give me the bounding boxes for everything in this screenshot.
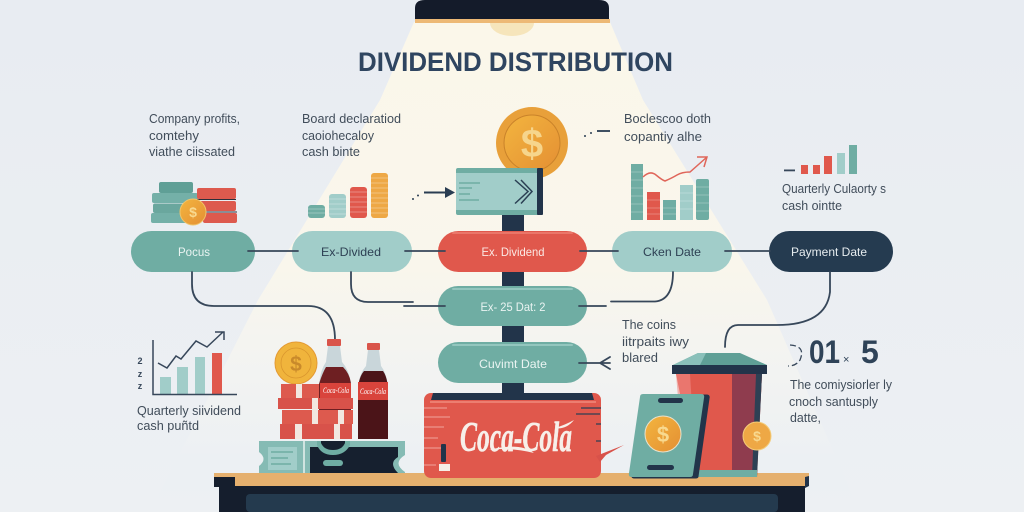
icon: cola bottle back xyxy=(319,339,351,412)
text block: company profits xyxy=(149,112,240,159)
pill: Ex-25 Date 2: Ex- 25 Dat: 2 xyxy=(480,300,546,314)
cooler with logo xyxy=(424,393,601,478)
arrow to sign xyxy=(412,187,455,200)
logo: Coca-Cola: Coca-Cola xyxy=(460,415,572,461)
text block: board declared: caoiohecaloy xyxy=(302,129,375,143)
text block: the coins: blared xyxy=(622,351,658,365)
icon: bottom left chart: 2 xyxy=(137,356,143,366)
table xyxy=(214,473,809,512)
icon: tablet with coin: $ xyxy=(657,422,669,447)
text block: quarterly dividend: Quarterly siividend xyxy=(137,404,241,418)
icon: money stack: $ xyxy=(189,204,197,220)
connectors xyxy=(192,251,830,369)
text block: top right: Boclescoo doth xyxy=(624,112,711,126)
text block: top right: copantiy alhe xyxy=(624,130,702,144)
post xyxy=(502,215,524,395)
icon: coin on bundles: $ xyxy=(290,353,302,376)
text block: quarterly dividend: cash puñtd xyxy=(137,419,199,433)
text block: the company: cnoch santusply xyxy=(789,395,879,409)
icon: ticket device xyxy=(259,441,405,478)
callout number xyxy=(788,334,879,370)
pill: Current Date xyxy=(438,342,587,383)
text block: top right xyxy=(624,112,711,144)
callout number: 5 xyxy=(861,334,879,370)
icon: tablet with coin xyxy=(629,394,710,478)
pill: Pocus xyxy=(131,231,255,272)
icon: coin stacks xyxy=(308,173,388,218)
pill: Ex Dividend xyxy=(438,231,587,272)
text block: the coins: iitrpaits iwy xyxy=(622,335,690,349)
text block: company profits: viathe ciissated xyxy=(149,145,235,159)
text block: board declared xyxy=(302,112,401,159)
title: DIVIDEND DISTRIBUTION xyxy=(358,47,673,77)
icon: money stack xyxy=(151,182,237,225)
icon: bottom left chart: z xyxy=(138,369,143,379)
pill: Payment Date xyxy=(769,231,893,272)
text block: the company xyxy=(789,378,893,425)
icon: cola bucket xyxy=(672,353,767,477)
icon: bottom left chart xyxy=(137,332,237,394)
dots near top right text xyxy=(584,132,592,137)
text block: quarterly dividend xyxy=(137,404,241,433)
icon: top dollar coin: $ xyxy=(521,122,543,166)
light beam xyxy=(150,22,860,512)
icon: bar chart with trend xyxy=(631,157,709,220)
lamp xyxy=(415,0,610,36)
pill: Ex-25 Date 2 xyxy=(438,286,587,326)
pill: Cken Date: Cken Date xyxy=(643,245,701,259)
text block: quarterly cash xyxy=(782,182,886,213)
text block: the company: datte, xyxy=(790,411,821,425)
icon: cola bottle front xyxy=(358,343,388,439)
text block: quarterly cash: Quarterly Culaorty s xyxy=(782,182,886,196)
text block: the coins xyxy=(622,318,690,365)
icon: cola bottle front: Coca-Cola xyxy=(360,387,386,396)
text block: company profits: Company profits, xyxy=(149,112,240,126)
text block: the coins: The coins xyxy=(622,318,676,332)
text block: company profits: comtehy xyxy=(149,129,200,143)
dashes near top right text xyxy=(597,130,610,132)
cooler nozzle xyxy=(596,445,624,462)
pill: Cken Date xyxy=(612,231,732,272)
pill: Ex Dividend: Ex. Dividend xyxy=(482,245,544,259)
icon: red cash bundles xyxy=(278,384,353,439)
text block: the company: The comiysiorler ly xyxy=(790,378,893,392)
icon: top dollar coin xyxy=(496,107,568,179)
icon: cola bottle back: Coca-Cola xyxy=(323,386,349,395)
callout number: 01 xyxy=(809,334,840,370)
sign: chevrons xyxy=(456,168,543,215)
icon: small bar chart xyxy=(784,145,857,174)
text block: board declared: Board declaratiod xyxy=(302,112,401,126)
pill: Ex-Divided: Ex-Divided xyxy=(321,245,381,259)
pill: Payment Date: Payment Date xyxy=(791,245,867,259)
text block: board declared: cash binte xyxy=(302,145,360,159)
icon: coin on bundles xyxy=(275,342,317,384)
text block: quarterly cash: cash ointte xyxy=(782,199,842,213)
callout number: × xyxy=(843,354,849,366)
icon: coin by bucket: $ xyxy=(753,428,761,444)
icon: coin by bucket xyxy=(743,422,771,450)
pill: Pocus: Pocus xyxy=(178,245,210,259)
icon: bottom left chart: z xyxy=(138,381,143,391)
pill: Current Date: Cuvimt Date xyxy=(479,357,547,371)
pill: Ex-Divided xyxy=(292,231,412,272)
